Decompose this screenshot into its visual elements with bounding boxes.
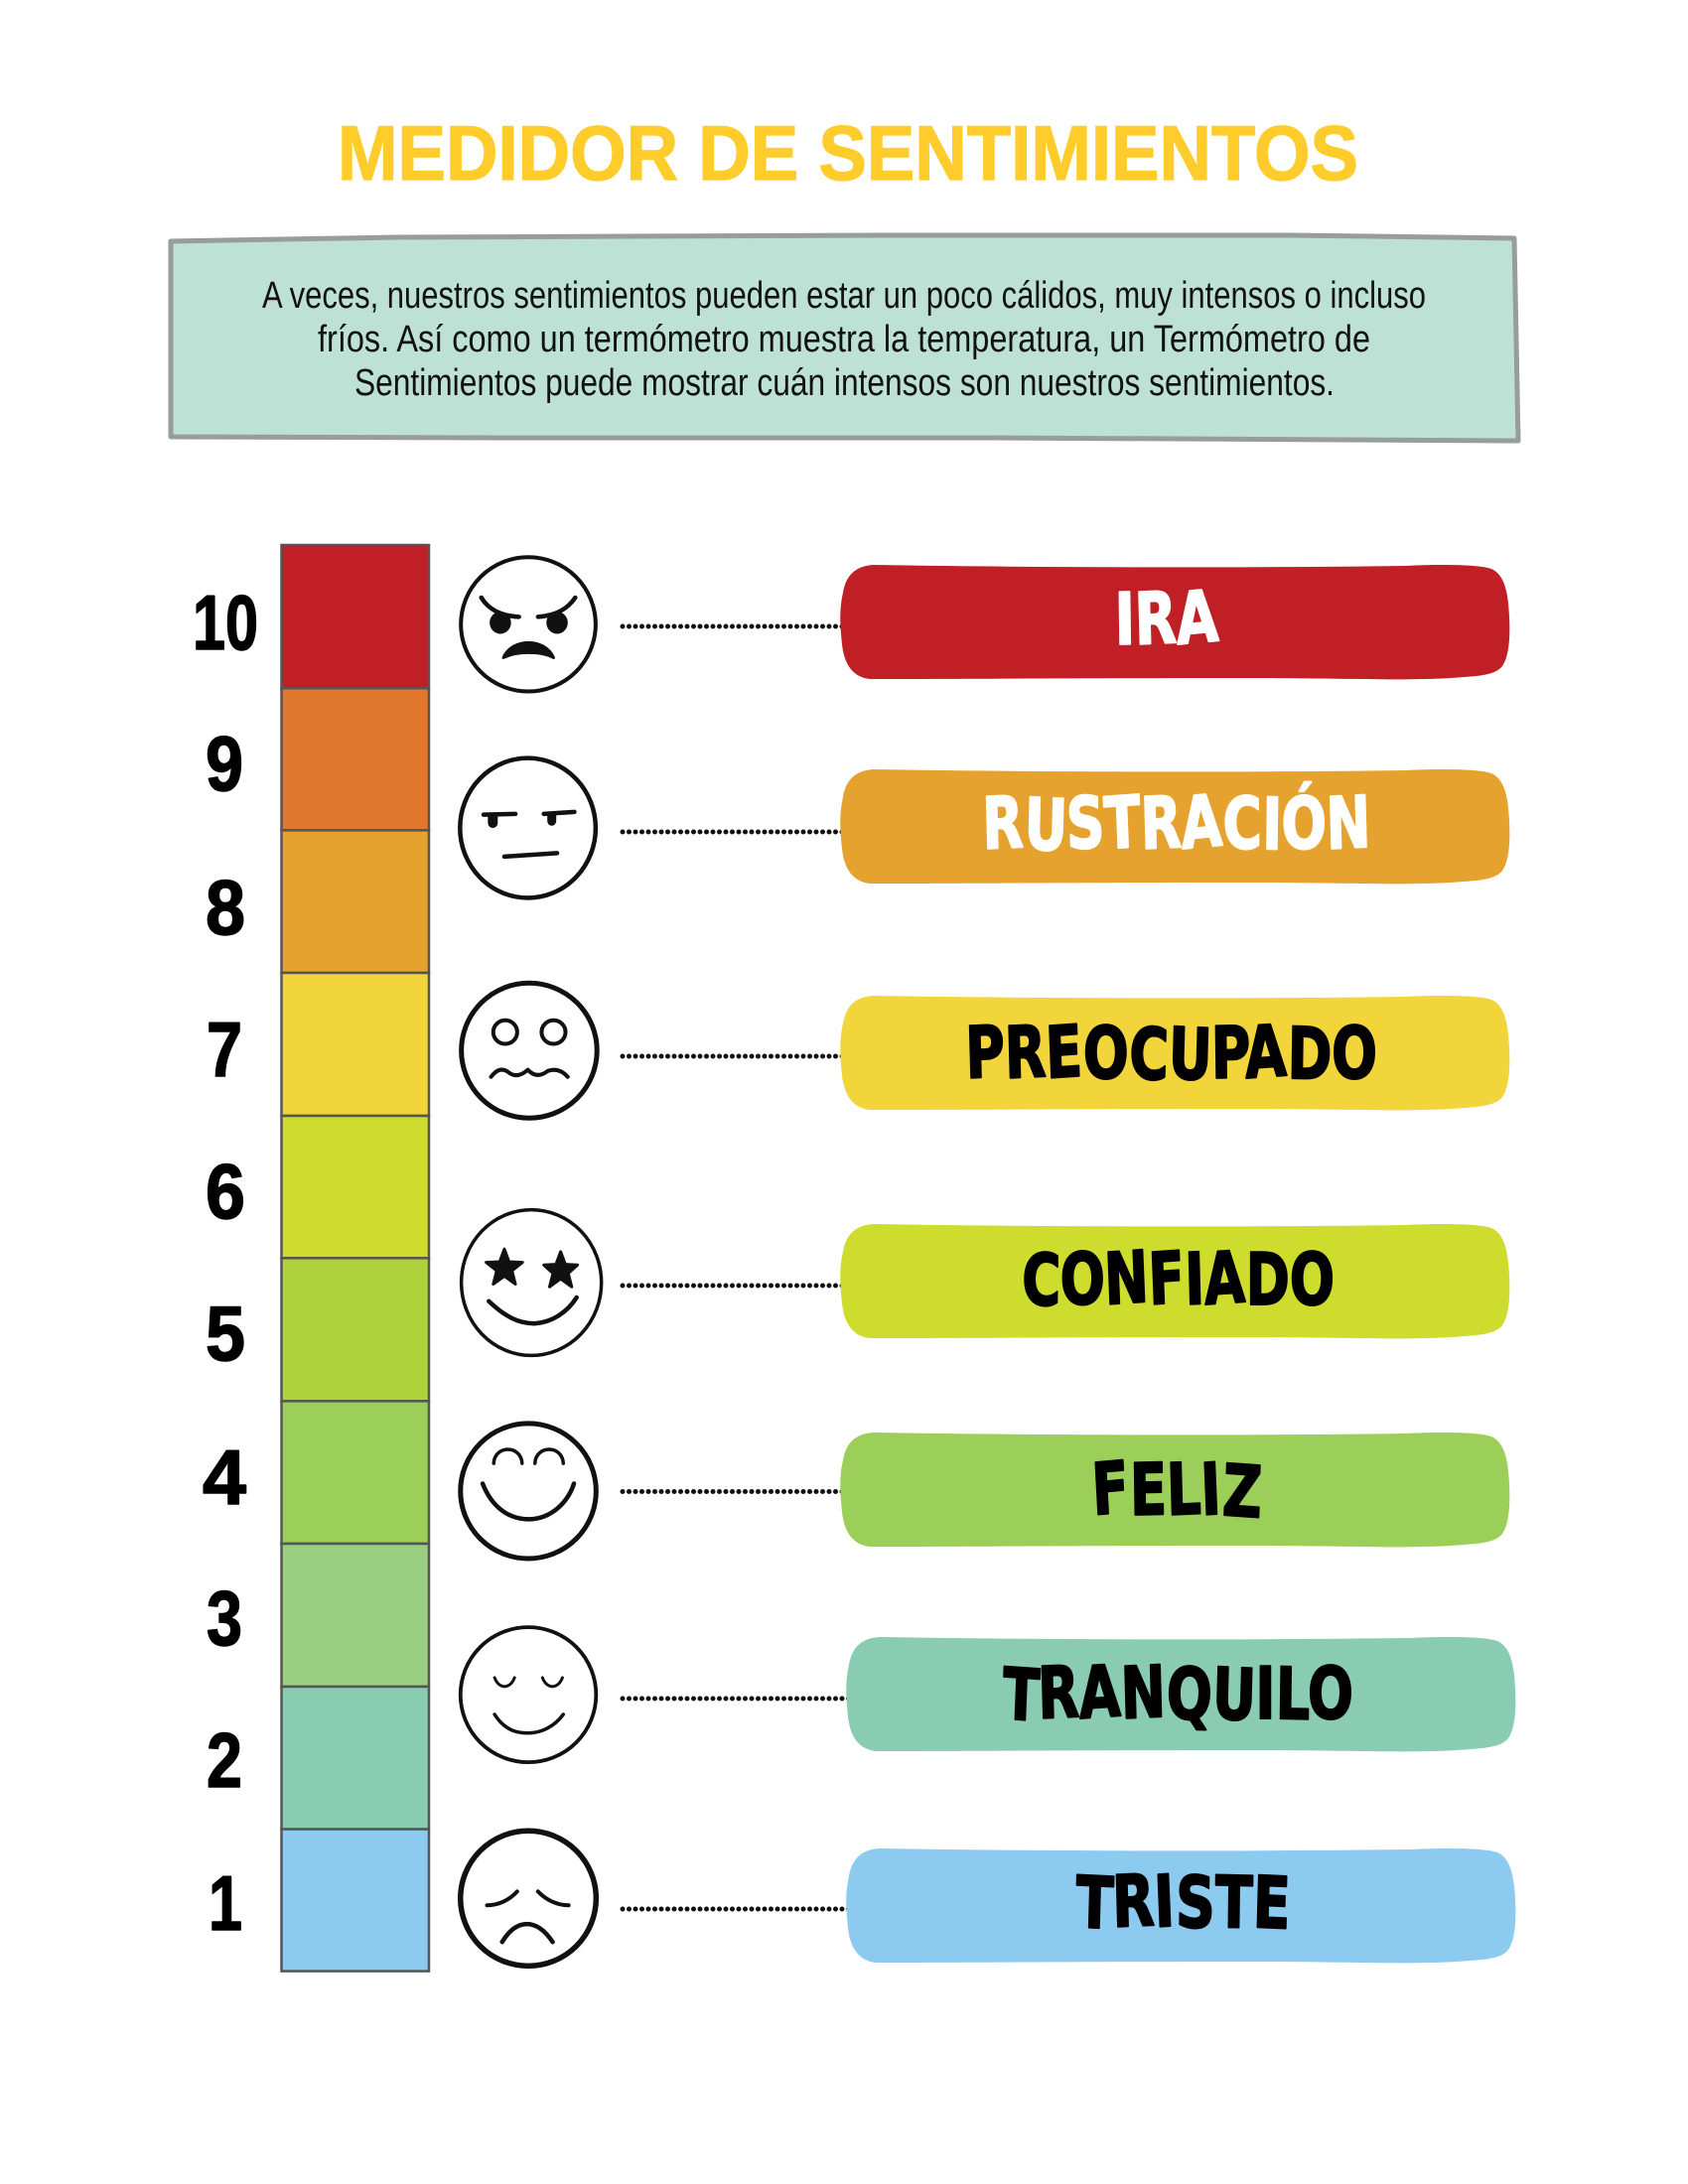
scale numbers: 8 (206, 864, 245, 951)
icon: happy face (461, 1424, 596, 1559)
label: TRANQUILO (846, 1637, 1515, 1751)
scale numbers: 9 (206, 720, 243, 807)
icon: frustrated face (460, 758, 596, 897)
scale numbers: 7 (207, 1006, 242, 1093)
intro paragraph: fríos. Así como un termómetro muestra la temperatura, un Termómetro de (318, 319, 1370, 360)
label: IRA (840, 565, 1509, 679)
icon: calm face (461, 1627, 596, 1762)
icon: star-eyed confident face (462, 1210, 602, 1355)
intro paragraph: Sentimientos puede mostrar cuán intensos son nuestros sentimientos. (354, 362, 1335, 404)
label: CONFIADO (840, 1224, 1509, 1338)
label: RUSTRACIÓN (840, 769, 1509, 884)
label: TRISTE: TRISTE (1074, 1859, 1292, 1945)
title: MEDIDOR DE SENTIMIENTOS (338, 109, 1358, 197)
label: IRA: IRA (1114, 575, 1220, 661)
scale numbers: 10 (193, 579, 258, 666)
label: CONFIADO: CONFIADO (1022, 1236, 1335, 1322)
intro paragraph: A veces, nuestros sentimientos pueden estar un poco cálidos, muy intensos o incluso (262, 275, 1426, 317)
scale numbers: 6 (206, 1148, 245, 1235)
label: RUSTRACIÓN: RUSTRACIÓN (981, 779, 1372, 868)
thermometer colour bar (282, 545, 429, 1972)
scale numbers: 4 (203, 1433, 246, 1521)
dotted connectors (623, 626, 849, 1909)
scale numbers: 5 (206, 1290, 245, 1377)
label: FELIZ: FELIZ (1088, 1446, 1264, 1534)
scale numbers: 2 (207, 1716, 242, 1804)
icon: worried face (462, 983, 597, 1118)
scale numbers: 3 (207, 1574, 242, 1662)
panel: intro text (171, 235, 1518, 441)
icon: sad face (461, 1831, 596, 1966)
label: PREOCUPADO: PREOCUPADO (964, 1010, 1377, 1097)
label: FELIZ (840, 1433, 1509, 1547)
icon: angry face (461, 557, 596, 691)
label: PREOCUPADO (840, 996, 1509, 1110)
panel background (171, 235, 1518, 441)
intro paragraph (262, 275, 1426, 404)
scale numbers (193, 579, 258, 1947)
scale numbers: 1 (209, 1859, 242, 1947)
label: TRISTE (846, 1848, 1515, 1963)
label: TRANQUILO: TRANQUILO (1001, 1650, 1353, 1737)
